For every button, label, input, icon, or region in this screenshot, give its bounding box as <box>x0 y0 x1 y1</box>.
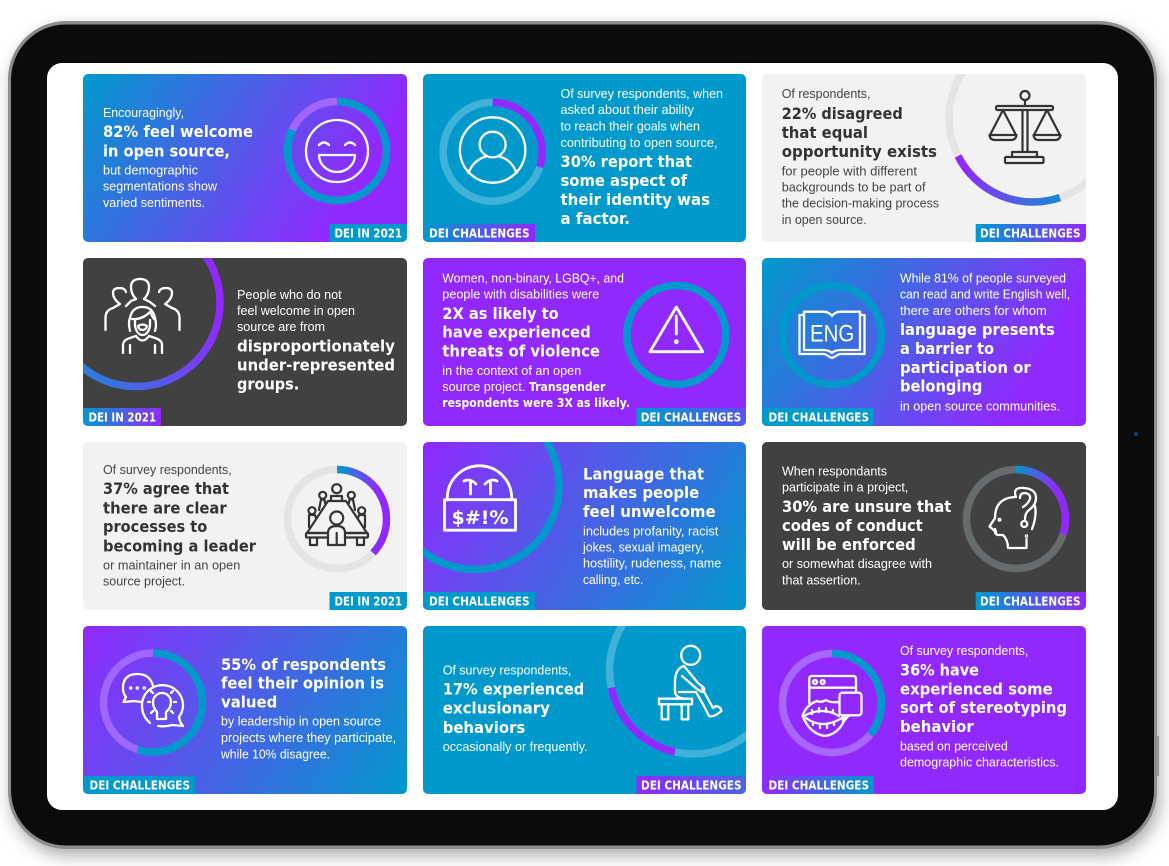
tag: DEI challenges: DEI CHALLENGES <box>641 778 742 792</box>
text: unwelcome: calling, etc. <box>583 573 643 587</box>
text: equal opportunity: for people with different <box>782 164 917 178</box>
tag: DEI challenges: DEI CHALLENGES <box>980 594 1080 608</box>
panel: 55% opinion valued <box>83 626 407 794</box>
icon: censored swearing face: $#!% <box>452 507 508 529</box>
text: conduct: When respondants <box>782 464 887 478</box>
text: unwelcome: jokes, sexual imagery, <box>582 540 704 554</box>
tag: DEI in 2021: DEI IN 2021 <box>88 410 156 424</box>
text: leader: or maintainer in an open <box>103 559 240 573</box>
ring: partial circle <box>423 442 563 574</box>
text: conduct: will be enforced <box>782 535 916 554</box>
text: identity: to reach their goals when <box>560 120 700 134</box>
text: conduct: or somewhat disagree with <box>782 557 932 571</box>
panel: 22% disagreed <box>762 74 1086 242</box>
ring: partial circle <box>83 258 224 390</box>
text: language <box>900 271 1070 413</box>
tag: DEI in 2021 <box>330 592 408 610</box>
icon: chat bubbles with light bulb <box>123 674 183 726</box>
text: threats: 2X as likely to <box>442 304 559 323</box>
text: welcome <box>103 106 253 210</box>
panel: unwelcome language <box>423 442 746 610</box>
panel: 82% feel welcome <box>83 74 408 242</box>
text: equal opportunity: backgrounds to be part of <box>782 180 926 194</box>
text: threats: threats of violence <box>442 341 600 360</box>
text: welcome: Encouragingly, <box>103 106 184 120</box>
text: equal opportunity: the decision-making process <box>782 196 939 210</box>
text: unwelcome: Language that <box>583 464 704 483</box>
ring: 22 percent partial circle <box>946 74 1086 206</box>
text: threats: people with disabilities were <box>442 287 599 301</box>
text: under-represented: under-represented <box>237 356 395 375</box>
tag: DEI challenges: DEI CHALLENGES <box>429 594 530 608</box>
text: threats: source project. <box>442 380 525 394</box>
tag: DEI challenges: DEI CHALLENGES <box>641 410 741 424</box>
text: leader <box>103 463 256 589</box>
tag: DEI challenges <box>423 592 535 610</box>
text: stereotyping: demographic characteristics. <box>900 755 1059 769</box>
text: under-represented: People who do not <box>237 288 342 302</box>
tag: DEI challenges: DEI CHALLENGES <box>90 778 190 792</box>
icon: mouth with window and speech bubble <box>802 676 862 736</box>
text: language: in open source communities. <box>900 399 1060 413</box>
panel: under-represented groups <box>83 258 407 426</box>
panel: 37% clear processes <box>83 442 408 610</box>
text: unwelcome: hostility, rudeness, name <box>583 557 721 571</box>
text: welcome: but demographic <box>103 163 199 177</box>
tag: DEI challenges: DEI CHALLENGES <box>768 410 869 424</box>
panel: codes of conduct <box>762 442 1086 610</box>
text: exclusionary: Of survey respondents, <box>443 664 571 678</box>
text: opinion: by leadership in open source <box>221 715 381 729</box>
tag: DEI challenges <box>423 224 535 242</box>
icon: English book: ENG <box>810 320 854 348</box>
text: language: language presents <box>900 320 1055 339</box>
icon: seated person <box>659 646 722 719</box>
icon: balance scales <box>990 91 1060 163</box>
text: opinion: projects where they participate, <box>221 731 396 745</box>
icon: laughing face <box>306 120 368 182</box>
text: conduct <box>782 464 952 587</box>
panel: 17% exclusionary behaviors <box>423 626 746 794</box>
text: welcome: 82% feel welcome <box>103 122 253 141</box>
text: opinion: feel their opinion is <box>221 674 384 693</box>
text: identity: Of survey respondents, when <box>560 87 723 101</box>
icon: English book <box>800 312 864 358</box>
text: identity: some aspect of <box>560 171 688 190</box>
text: unwelcome: makes people <box>583 483 699 502</box>
icon: meeting table <box>306 484 368 545</box>
text: under-represented: disproportionately <box>237 337 396 356</box>
icon: head with question mark <box>990 488 1036 548</box>
tag: DEI challenges <box>762 408 874 426</box>
ring: 30 percent <box>966 470 1066 568</box>
icon: person in circle <box>460 117 525 183</box>
panel: 36% stereotyping <box>762 626 1086 794</box>
tag: DEI challenges <box>636 408 746 426</box>
text: conduct: that assertion. <box>782 573 861 587</box>
text: language: belonging <box>900 377 982 396</box>
text: equal opportunity: opportunity exists <box>782 142 937 161</box>
text: equal opportunity: Of respondents, <box>782 87 870 101</box>
tag: DEI challenges: DEI CHALLENGES <box>768 778 869 792</box>
icon: censored swearing face <box>444 466 516 530</box>
text: conduct: participate in a project, <box>782 481 908 495</box>
ring: full teal <box>627 286 726 384</box>
text: under-represented: source are from <box>237 320 325 334</box>
ring: 17 percent partial circle <box>606 626 746 758</box>
text: language: can read and write English well, <box>900 288 1070 302</box>
text: under-represented: groups. <box>237 374 299 394</box>
text: stereotyping: sort of stereotyping <box>900 698 1067 717</box>
text: language: While 81% of people surveyed <box>900 271 1066 285</box>
text: identity <box>560 87 723 228</box>
text: stereotyping: Of survey respondents, <box>900 644 1028 658</box>
text: exclusionary: 17% experienced <box>443 680 584 699</box>
ring: 82 percent <box>288 102 386 200</box>
text: stereotyping: experienced some <box>900 679 1053 698</box>
text: under-represented <box>237 288 396 394</box>
panel: language barrier <box>762 258 1086 426</box>
icon: warning triangle <box>650 307 703 352</box>
text: leader: becoming a leader <box>103 536 256 555</box>
tag: DEI challenges: DEI CHALLENGES <box>429 226 530 240</box>
text: language: a barrier to <box>900 339 994 358</box>
text: stereotyping: based on perceived <box>900 739 1008 753</box>
text: identity: a factor. <box>560 209 630 228</box>
ring: full teal <box>782 286 882 384</box>
text: language: there are others for whom <box>900 304 1047 318</box>
text: welcome: in open source, <box>103 142 230 160</box>
panel: threats of violence <box>423 258 746 426</box>
text: welcome: varied sentiments. <box>103 196 205 210</box>
text: opinion: valued <box>221 693 277 712</box>
text: language: participation or <box>900 358 1031 377</box>
text: unwelcome: includes profanity, racist <box>583 524 719 538</box>
tag: DEI challenges <box>83 776 195 794</box>
text: leader: there are clear <box>103 498 227 517</box>
panel: 30% identity factor <box>423 74 746 242</box>
text: under-represented: feel welcome in open <box>237 304 355 318</box>
text: threats: in the context of an open <box>442 364 581 378</box>
tag: DEI challenges <box>762 776 874 794</box>
ring: 30 percent <box>443 102 542 201</box>
text: stereotyping: 36% have <box>900 660 979 679</box>
text: threats: have experienced <box>442 323 591 342</box>
tag: DEI challenges: DEI CHALLENGES <box>980 226 1080 240</box>
text: opinion: while 10% disagree. <box>220 747 330 761</box>
text: exclusionary <box>443 664 588 754</box>
text: identity: their identity was <box>560 190 710 209</box>
text: conduct: 30% are unsure that <box>782 497 952 516</box>
text: opinion <box>220 655 396 761</box>
text: exclusionary: behaviors <box>443 718 525 737</box>
icon: group of people with woman in front <box>106 279 180 353</box>
tag: DEI challenges <box>636 776 746 794</box>
text: opinion: 55% of respondents <box>221 655 386 674</box>
text: identity: 30% report that <box>560 152 692 171</box>
text: equal opportunity: that equal <box>782 123 868 142</box>
text: threats: Women, non-binary, LGBQ+, and <box>442 271 624 285</box>
text: leader: 37% agree that <box>103 479 229 498</box>
text: equal opportunity: in open source. <box>782 213 867 227</box>
text: exclusionary: occasionally or frequently. <box>443 740 588 754</box>
text: stereotyping <box>900 644 1067 769</box>
ring: 55 percent <box>104 653 202 752</box>
text: stereotyping: behavior <box>900 717 974 736</box>
text: threats: Transgender <box>529 380 605 394</box>
tag: DEI in 2021: DEI IN 2021 <box>334 594 402 608</box>
text: leader: Of survey respondents, <box>103 463 232 477</box>
text: unwelcome: feel unwelcome <box>583 502 716 521</box>
text: identity: asked about their ability <box>560 103 695 117</box>
text: exclusionary: exclusionary <box>443 699 551 718</box>
tag: DEI in 2021 <box>330 224 408 242</box>
text: unwelcome <box>582 464 721 587</box>
text: leader: processes to <box>103 517 207 536</box>
ring: 37 percent <box>288 470 386 568</box>
text: leader: source project. <box>103 575 185 589</box>
tag: DEI in 2021: DEI IN 2021 <box>334 226 402 240</box>
text: equal opportunity: 22% disagreed <box>782 104 903 123</box>
text: threats <box>442 271 630 410</box>
tag: DEI in 2021 <box>83 408 161 426</box>
text: identity: contributing to open source, <box>560 136 718 150</box>
ring: 36 percent <box>782 654 882 752</box>
text: conduct: codes of conduct <box>782 516 923 535</box>
text: equal opportunity <box>782 87 939 227</box>
text: threats: respondents were 3X as likely. <box>442 396 630 410</box>
text: welcome: segmentations show <box>103 180 218 194</box>
